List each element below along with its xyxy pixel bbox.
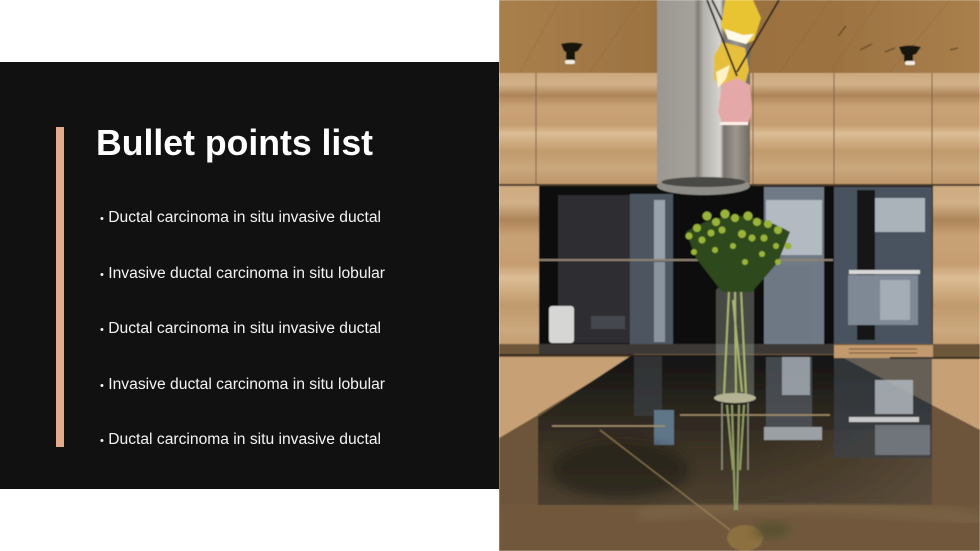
title: Bullet points list xyxy=(96,122,373,163)
photo: kitchen interior xyxy=(499,0,980,551)
vase with flowers xyxy=(686,210,792,510)
bullet 3: • Ductal carcinoma in situ invasive ductal xyxy=(100,320,381,337)
pendant lamps xyxy=(707,0,779,125)
text block: heading and bullets xyxy=(96,122,385,448)
black backsplash xyxy=(539,186,933,344)
ceiling spotlights xyxy=(561,42,921,65)
panel: dark text background xyxy=(0,62,499,489)
bullet 5: • Ductal carcinoma in situ invasive ductal xyxy=(100,431,381,448)
range hood xyxy=(657,0,750,195)
wood cabinets xyxy=(499,73,980,356)
ceiling xyxy=(499,0,980,73)
accent bar xyxy=(56,127,64,447)
reflections xyxy=(634,356,662,416)
bullet 2: • Invasive ductal carcinoma in situ lobular xyxy=(100,265,385,282)
bullet 4: • Invasive ductal carcinoma in situ lobular xyxy=(100,376,385,393)
countertop xyxy=(499,344,980,551)
bullet list xyxy=(100,209,385,448)
bullet 1: • Ductal carcinoma in situ invasive ductal xyxy=(100,209,381,226)
